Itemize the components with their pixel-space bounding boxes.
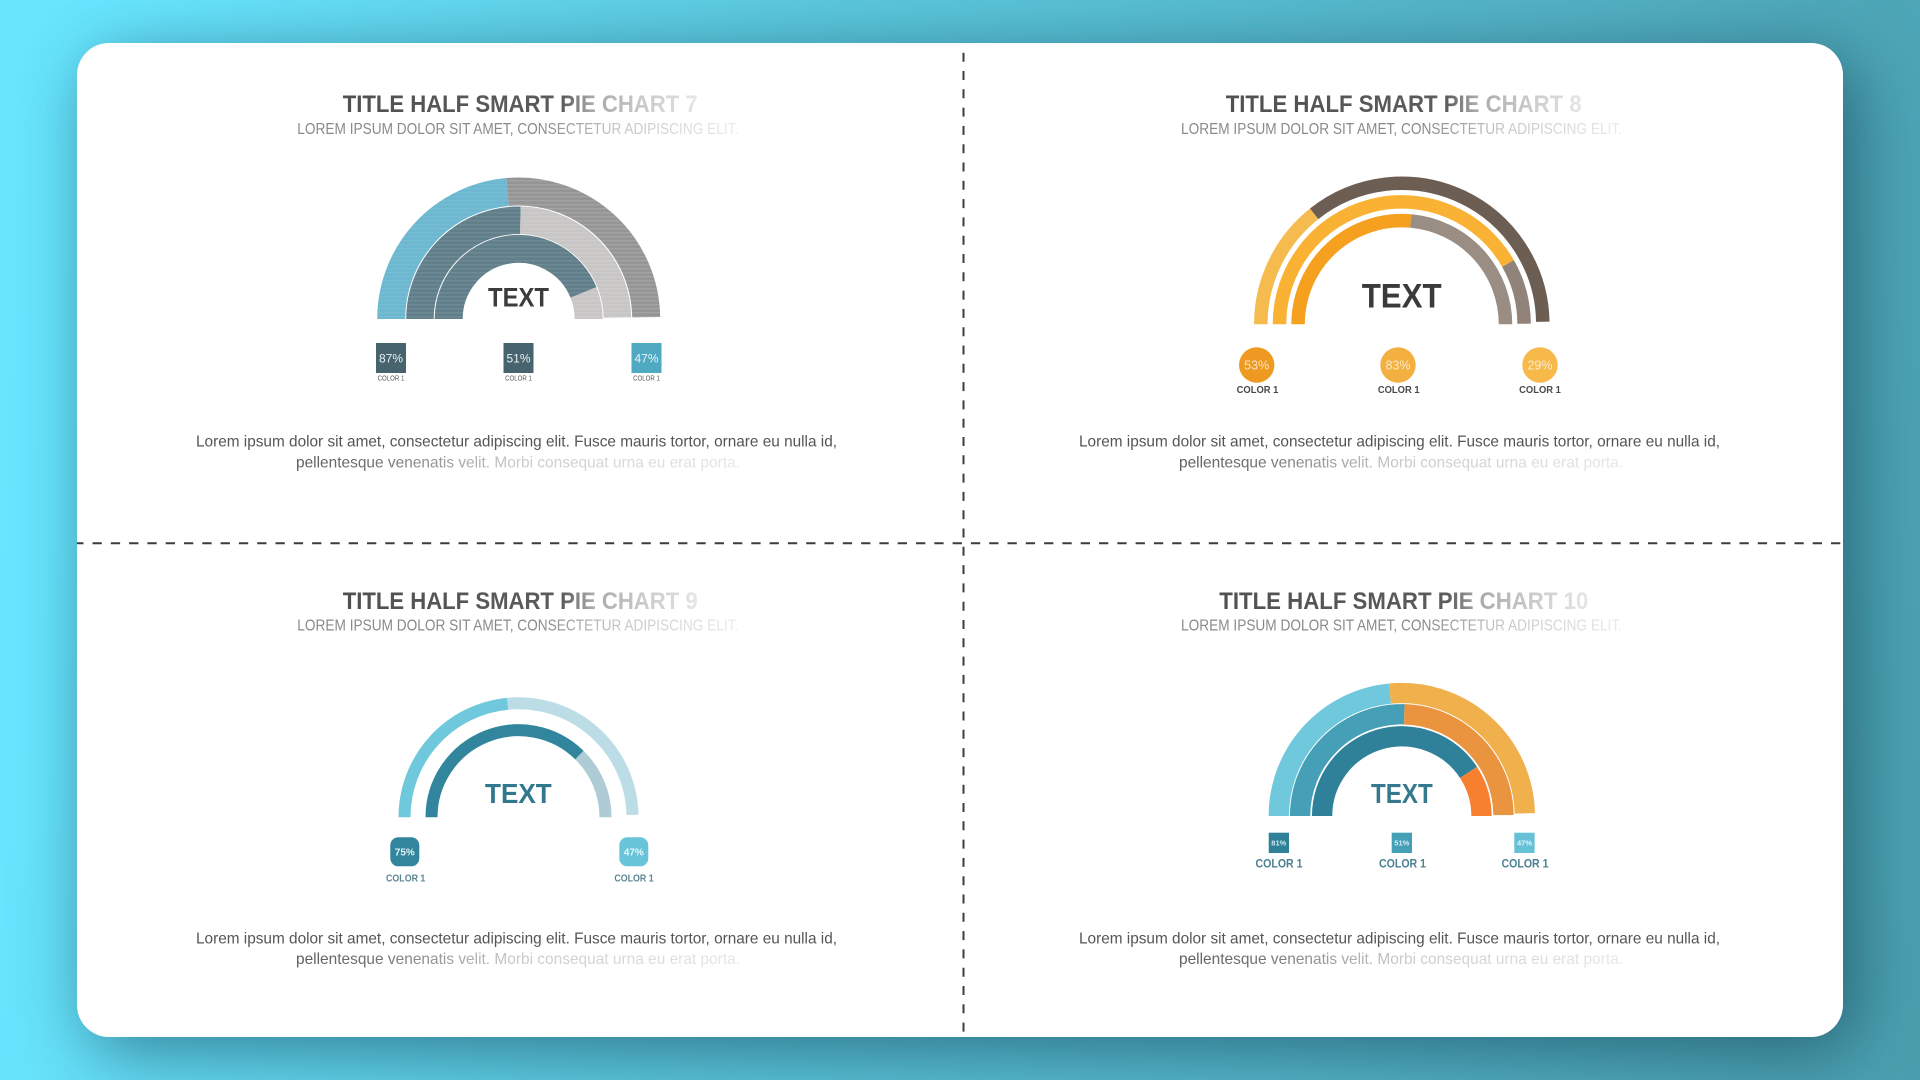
legend item 81%: COLOR 1 xyxy=(1256,856,1303,870)
panel: chart 8 xyxy=(1079,91,1720,472)
legend item 53%: 53% xyxy=(1244,358,1269,372)
legend item 47%: COLOR 1 xyxy=(1502,856,1549,870)
legend item 29%: 29% xyxy=(1527,358,1553,372)
body text: chart 10: Lorem ipsum dolor sit amet, consectetur adipiscing elit. Fusce mauris tortor, ornare eu nulla id, xyxy=(1079,930,1720,948)
legend item 75%: COLOR 1 xyxy=(386,874,426,885)
legend item 47%: 47% xyxy=(624,848,644,858)
heading: chart 8 title: TITLE HALF SMART PIE CHART 8 xyxy=(1226,91,1582,118)
legend item 51% xyxy=(1379,833,1426,870)
legend item 83% xyxy=(1378,347,1420,396)
legend item 81%: 81% xyxy=(1271,838,1287,848)
legend item 47% xyxy=(632,343,662,382)
legend item 29% xyxy=(1519,347,1561,396)
legend item 47%: 47% xyxy=(634,352,659,366)
half pie chart 7 xyxy=(391,192,646,319)
body text: chart 9 xyxy=(196,930,837,968)
legend item 53%: COLOR 1 xyxy=(1237,384,1278,396)
legend item 87%: COLOR 1 xyxy=(378,376,404,382)
chart 9 center label: TEXT xyxy=(485,778,552,809)
subtitle: chart 8: LOREM IPSUM DOLOR SIT AMET, CONSECTETUR ADIPISCING ELIT. xyxy=(1181,121,1622,138)
legend item 47%: COLOR 1 xyxy=(633,376,660,382)
body text: chart 8 xyxy=(1079,434,1720,472)
legend item 47%: 47% xyxy=(1517,838,1532,848)
legend item 29%: COLOR 1 xyxy=(1519,384,1561,396)
heading: chart 9 title: TITLE HALF SMART PIE CHART 9 xyxy=(343,588,698,615)
body text: chart 7: pellentesque venenatis velit. Morbi consequat urna eu erat porta. xyxy=(296,454,740,472)
horizontal dashed divider xyxy=(77,542,1843,544)
subtitle: chart 9: LOREM IPSUM DOLOR SIT AMET, CONSECTETUR ADIPISCING ELIT. xyxy=(297,618,738,634)
half pie chart 8 xyxy=(1261,183,1543,324)
body text: chart 9: pellentesque venenatis velit. Morbi consequat urna eu erat porta. xyxy=(296,951,740,968)
legend item 51%: 51% xyxy=(506,352,531,366)
body text: chart 8: pellentesque venenatis velit. Morbi consequat urna eu erat porta. xyxy=(1179,454,1623,472)
body text: chart 8: Lorem ipsum dolor sit amet, consectetur adipiscing elit. Fusce mauris tortor, ornare eu nulla id, xyxy=(1079,434,1720,450)
legend item 51% xyxy=(504,343,534,382)
body text: chart 10 xyxy=(1079,930,1720,968)
chart 10 center label: TEXT xyxy=(1371,778,1433,809)
heading: chart 10 title: TITLE HALF SMART PIE CHART 10 xyxy=(1219,588,1588,615)
subtitle: chart 10: LOREM IPSUM DOLOR SIT AMET, CONSECTETUR ADIPISCING ELIT. xyxy=(1181,618,1622,634)
half pie chart 9 xyxy=(404,703,632,817)
legend item 51%: 51% xyxy=(1394,838,1410,848)
legend item 47% xyxy=(614,837,654,885)
legend item 83%: 83% xyxy=(1385,358,1411,372)
body text: chart 7 xyxy=(196,434,837,472)
legend item 51%: COLOR 1 xyxy=(505,376,532,382)
subtitle: chart 7: LOREM IPSUM DOLOR SIT AMET, CONSECTETUR ADIPISCING ELIT. xyxy=(297,121,738,138)
vertical dashed divider xyxy=(962,53,964,1037)
panel: chart 10 xyxy=(1079,588,1720,968)
legend item 87% xyxy=(376,343,406,382)
legend item 53% xyxy=(1237,347,1278,396)
heading: chart 7 title: TITLE HALF SMART PIE CHART 7 xyxy=(343,91,698,118)
legend item 87%: 87% xyxy=(379,352,403,366)
chart 7 center label: TEXT xyxy=(488,282,549,312)
legend item 47% xyxy=(1502,833,1549,870)
body text: chart 10: pellentesque venenatis velit. Morbi consequat urna eu erat porta. xyxy=(1179,951,1623,968)
body text: chart 7: Lorem ipsum dolor sit amet, consectetur adipiscing elit. Fusce mauris tortor, ornare eu nulla id, xyxy=(196,434,837,450)
chart 8 center label: TEXT xyxy=(1362,277,1442,315)
legend item 75%: 75% xyxy=(395,848,415,858)
body text: chart 9: Lorem ipsum dolor sit amet, consectetur adipiscing elit. Fusce mauris tortor, ornare eu nulla id, xyxy=(196,930,837,948)
legend item 47%: COLOR 1 xyxy=(614,874,654,885)
panel: chart 9 xyxy=(196,588,837,968)
half pie chart 10 xyxy=(1279,693,1525,816)
legend item 81% xyxy=(1256,833,1303,870)
legend item 51%: COLOR 1 xyxy=(1379,856,1426,870)
panel: chart 7 xyxy=(196,91,837,472)
legend item 75% xyxy=(386,837,426,885)
legend item 83%: COLOR 1 xyxy=(1378,384,1420,396)
